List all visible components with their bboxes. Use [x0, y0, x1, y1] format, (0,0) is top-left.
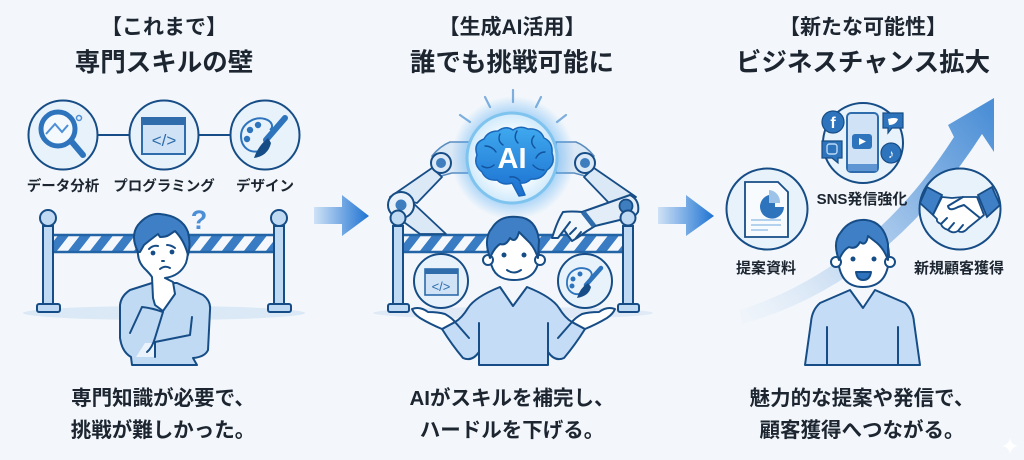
robot arms	[388, 142, 638, 241]
text: opportunity: 魅力的な提案や発信で、	[750, 386, 974, 410]
heading: opportunity: ビジネスチャンス拡大	[736, 49, 990, 77]
icon row: skills	[27, 100, 300, 195]
icon: code on hand	[414, 254, 468, 308]
barrier	[23, 210, 305, 320]
icon: palette on hand	[558, 254, 612, 308]
text: before	[71, 386, 255, 442]
icon: glowing AI brain	[451, 90, 575, 220]
head	[490, 224, 539, 280]
hand: left	[412, 308, 455, 329]
barrier	[373, 226, 653, 319]
labels: skills: データ分析	[27, 177, 100, 195]
icon: programming	[130, 100, 198, 170]
hand: right	[572, 308, 615, 329]
growth arrow	[740, 98, 994, 324]
icon: data analysis	[28, 100, 98, 170]
labels: skills: プログラミング	[113, 177, 215, 195]
icon: question mark: ?	[191, 205, 207, 235]
text: opportunity	[750, 386, 974, 442]
text: before: 専門知識が必要で、	[71, 386, 255, 410]
label: proposal: 提案資料	[736, 259, 796, 277]
arrow: first	[314, 195, 369, 236]
labels: skills: デザイン	[236, 177, 294, 195]
text: before: 挑戦が難しかった。	[71, 418, 255, 442]
icon: glowing AI brain: AI	[498, 143, 526, 175]
heading: before	[75, 16, 253, 77]
icon: corner sparkle	[1002, 438, 1018, 454]
rays	[460, 90, 566, 122]
icon: SNS: ♪	[888, 147, 894, 161]
robot arm: left	[388, 142, 470, 234]
person: smiling, holding skills	[412, 217, 615, 365]
panel: with AI	[373, 15, 653, 442]
text: opportunity: 顧客獲得へつながる。	[760, 418, 964, 442]
heading: AI: 誰でも挑戦可能に	[410, 49, 614, 77]
icon: design	[230, 100, 300, 170]
robot arm: right	[552, 142, 638, 241]
icon: programming: </>	[152, 131, 176, 150]
heading: before: 専門スキルの壁	[75, 49, 253, 77]
icon: handshake	[920, 168, 1000, 250]
person: worried	[120, 214, 210, 365]
panel: opportunity	[726, 16, 1004, 442]
heading: opportunity	[736, 16, 990, 77]
arrow: second	[658, 195, 714, 236]
labels: skills	[27, 177, 294, 195]
icon: SNS: f	[830, 115, 836, 132]
icon: SNS	[822, 103, 903, 183]
heading: AI	[410, 15, 614, 77]
label: new customers: 新規顧客獲得	[914, 259, 1004, 277]
heading: AI: 【生成AI活用】	[438, 15, 586, 39]
text: AI: ハードルを下げる。	[420, 419, 604, 442]
person: happy	[805, 220, 920, 365]
text: AI: AIがスキルを補完し、	[410, 386, 614, 410]
heading: opportunity: 【新たな可能性】	[779, 16, 947, 39]
label: SNS: SNS発信強化	[817, 190, 907, 208]
icon: proposal document	[726, 168, 808, 250]
panel: before	[23, 16, 305, 442]
icon: code on hand: </>	[432, 279, 450, 294]
heading: before: 【これまで】	[101, 16, 227, 39]
text: AI	[410, 386, 614, 442]
